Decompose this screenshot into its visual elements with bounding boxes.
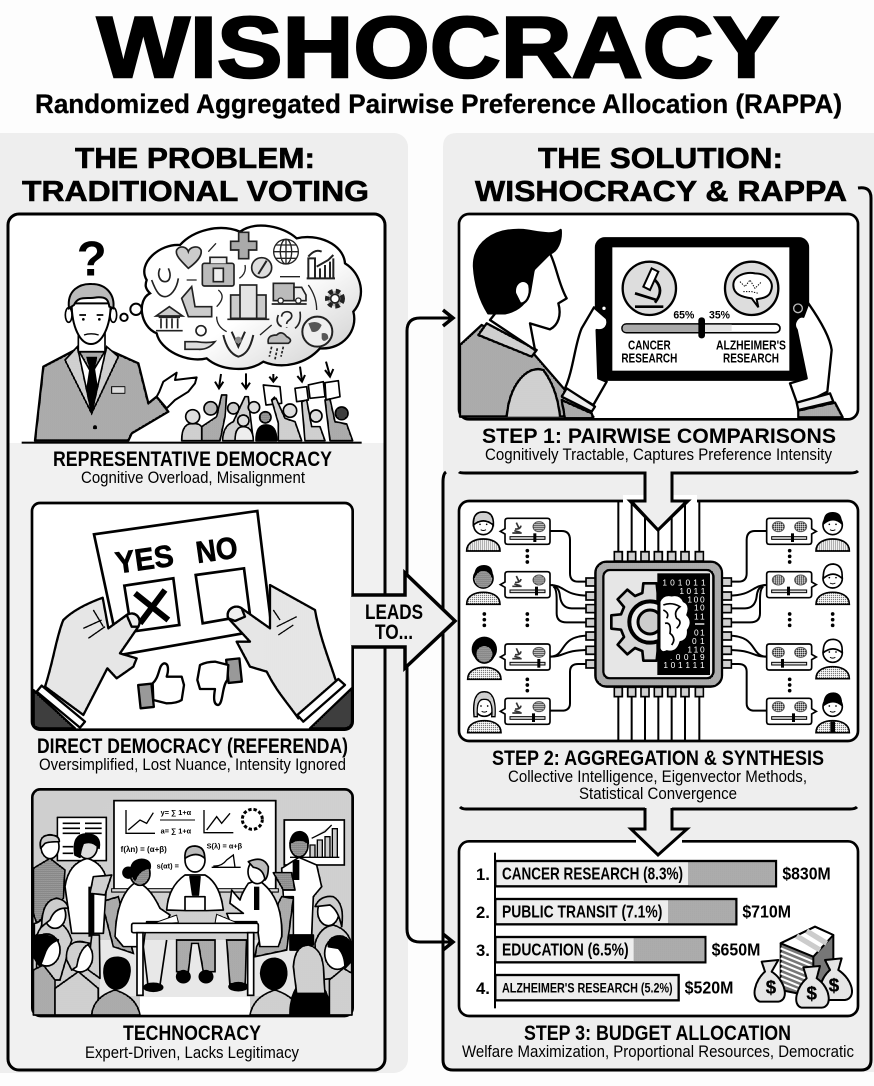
scene: direct democracy ballot — [32, 503, 353, 730]
bar 4: alzheimer's research: $520M — [685, 978, 733, 998]
arrow: leads to: LEADS — [365, 601, 423, 624]
icon: gear — [611, 583, 671, 661]
slider: 65% — [673, 310, 695, 322]
caption: direct democracy: Oversimplified, Lost Nuance, Intensity Ignored — [39, 756, 346, 774]
caption: step 2: Statistical Convergence — [579, 785, 737, 803]
caption: technocracy: Expert-Driven, Lacks Legitimacy — [85, 1044, 300, 1062]
binary data: 1 1 0 — [687, 644, 705, 654]
binary data: 1 0 — [694, 603, 705, 613]
binary data: 1 0 1 0 1 1 — [662, 578, 706, 588]
caption: direct democracy: DIRECT DEMOCRACY (REFERENDA) — [37, 735, 348, 758]
ballot paper — [94, 511, 272, 655]
bar 4: alzheimer's research: 4. — [476, 979, 490, 998]
left participants — [467, 512, 501, 733]
bar 3: education: $650M — [712, 940, 760, 960]
binary data: . 0 0 1 9 — [670, 652, 705, 662]
arrow: step 2 to step 3 — [460, 807, 857, 855]
caption: step 1: Cognitively Tractable, Captures Preference Intensity — [485, 446, 833, 464]
ellipsis dots — [482, 549, 834, 692]
icon: brain — [725, 262, 778, 315]
slider: 35% — [709, 310, 731, 322]
icon: thought cloud — [120, 226, 361, 369]
scene: representative democracy — [22, 226, 362, 444]
binary data: 1 0 0 — [687, 595, 705, 605]
heading: the solution: WISHOCRACY & RAPPA — [475, 176, 847, 208]
caption: technocracy: TECHNOCRACY — [123, 1022, 261, 1045]
panel: the solution — [443, 133, 874, 1072]
binary data: 0 1 — [692, 636, 705, 646]
seated panel — [115, 846, 282, 947]
heading: the problem: TRADITIONAL VOTING — [22, 176, 369, 208]
left poster — [57, 817, 106, 861]
bar 3: education: 3. — [476, 941, 490, 960]
caption: representative democracy — [53, 448, 332, 487]
audience foreground — [33, 896, 353, 1015]
icon: question mark: ? — [77, 231, 107, 286]
icon: hands holding tablet — [562, 303, 843, 418]
icon: money stack and bags: $ — [829, 975, 840, 996]
binary data: 1 0 1 1 — [679, 586, 706, 596]
figure: politician — [35, 284, 168, 441]
binary data: 0 1 — [694, 628, 705, 638]
icon: right hand — [228, 585, 352, 728]
caption: step 3 — [462, 1022, 854, 1061]
option labels — [621, 338, 786, 365]
caption: direct democracy — [37, 735, 348, 774]
left opinion bubbles — [500, 518, 550, 724]
whiteboard: s(αt) = — [157, 862, 179, 871]
icon: thumbs down — [197, 658, 242, 705]
chairs — [102, 897, 293, 957]
arrow: leads to — [350, 573, 455, 668]
right opinion bubbles — [767, 518, 816, 724]
option labels: RESEARCH — [621, 351, 677, 365]
option labels: RESEARCH — [723, 351, 779, 365]
panel: the problem — [0, 133, 408, 1073]
arrow: step 1 to step 2 — [459, 471, 858, 530]
binary data — [662, 578, 706, 670]
standing experts — [33, 832, 322, 978]
icon: money stack and bags — [755, 927, 852, 1008]
whiteboard — [112, 801, 278, 892]
scene: technocracy meeting — [32, 789, 353, 1016]
step 1 illustration — [459, 214, 858, 419]
whiteboard: a= ∑ 1+α — [161, 826, 192, 835]
binary data: 1 0 1 1 1 1 — [663, 660, 705, 670]
bar 1: cancer research — [476, 861, 831, 886]
option labels: ALZHEIMER'S — [716, 338, 786, 352]
caption: representative democracy: REPRESENTATIVE DEMOCRACY — [53, 448, 332, 471]
icons: arrows down — [215, 362, 333, 389]
icon: protest crowd — [182, 381, 353, 441]
icon: brain — [660, 596, 690, 652]
bar axis — [494, 853, 496, 1008]
caption: representative democracy: Cognitive Overload, Misalignment — [81, 469, 305, 487]
connectors to chip — [550, 531, 767, 711]
whiteboard: f(λn) = (α+β) — [121, 845, 167, 854]
caption: step 1 — [482, 425, 836, 464]
bar 2: public transit — [476, 899, 791, 924]
heading: the problem: THE PROBLEM: — [75, 143, 315, 175]
title: WISHOCRACY — [97, 0, 779, 96]
whiteboard: y= ∑ 1+α — [161, 808, 192, 817]
option labels: CANCER — [628, 338, 671, 352]
tablet device — [596, 238, 808, 380]
caption: technocracy — [85, 1022, 300, 1062]
step 3 chart panel — [459, 841, 858, 1016]
right chart poster — [284, 820, 344, 865]
heading: the solution: THE SOLUTION: — [538, 143, 783, 175]
heading: the problem — [22, 143, 369, 208]
binary data: 1 1 — [694, 611, 705, 621]
icon: left hand — [33, 598, 140, 728]
caption: step 2: Collective Intelligence, Eigenvector Methods, — [508, 768, 807, 786]
caption: step 2: STEP 2: AGGREGATION & SYNTHESIS — [492, 747, 824, 770]
bus lines — [618, 501, 699, 740]
bar 2: public transit: PUBLIC TRANSIT (7.1%) — [502, 902, 662, 922]
bar 2: public transit: 2. — [476, 903, 490, 922]
arrow: connector to step 1 and step 3 — [407, 310, 453, 950]
caption: step 3: STEP 3: BUDGET ALLOCATION — [524, 1022, 791, 1045]
subtitle: Randomized Aggregated Pairwise Preference Allocation (RAPPA) — [35, 89, 842, 119]
bar 4: alzheimer's research: ALZHEIMER'S RESEARCH (5.2%) — [502, 981, 673, 996]
bar 1: cancer research: CANCER RESEARCH (8.3%) — [502, 864, 683, 884]
heading: the solution — [475, 143, 847, 208]
icon: microscope — [623, 262, 676, 315]
figure: person from behind — [460, 230, 593, 417]
icon: money stack and bags: $ — [766, 976, 777, 997]
caption: step 1: STEP 1: PAIRWISE COMPARISONS — [482, 425, 836, 448]
bar 3: education: EDUCATION (6.5%) — [502, 940, 629, 960]
bar 4: alzheimer's research — [476, 975, 733, 1000]
caption: step 2 — [492, 747, 824, 803]
table — [132, 914, 258, 995]
bar 3: education — [476, 937, 760, 962]
ground line — [22, 442, 362, 444]
whiteboard: S(λ) = α+β — [207, 841, 243, 850]
bar 1: cancer research: $830M — [782, 864, 831, 884]
right participants — [816, 512, 849, 733]
bar 2: public transit: $710M — [742, 902, 791, 922]
bar 1: cancer research: 1. — [476, 865, 490, 884]
icon: money stack and bags: $ — [806, 982, 817, 1003]
arrow: leads to: TO... — [375, 621, 413, 644]
ballot paper: YES — [113, 539, 176, 581]
slider — [622, 310, 780, 338]
ballot paper: NO — [194, 531, 240, 570]
step 2 illustration — [459, 501, 858, 741]
icon: thumbs up — [138, 663, 184, 708]
AI chip — [586, 552, 731, 697]
icon: open hand — [157, 373, 197, 408]
